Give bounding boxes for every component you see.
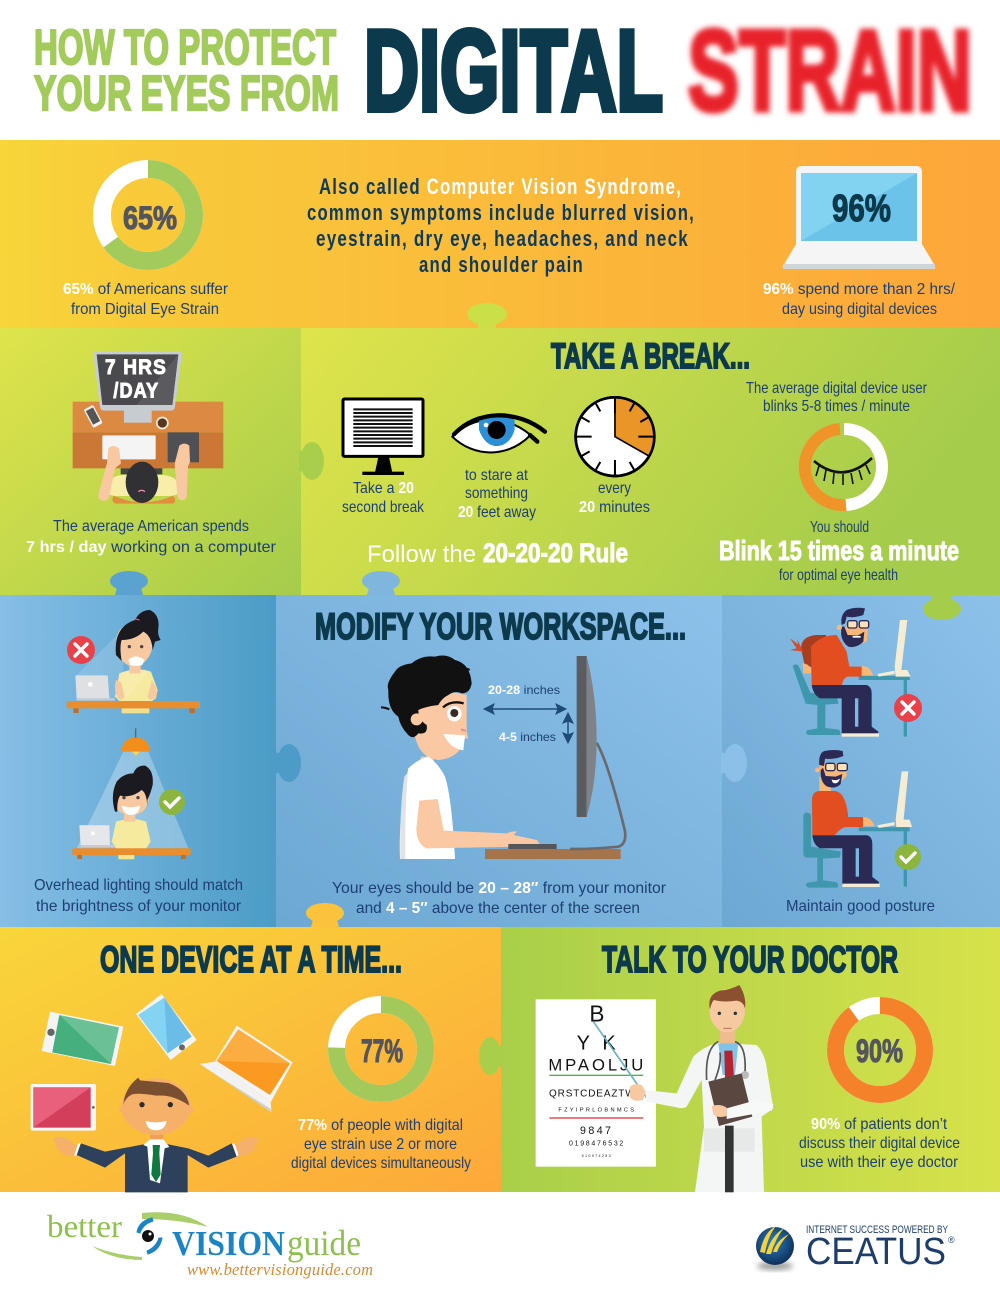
illustration: poor lighting girl [67,610,200,713]
caption: 90%: use with their eye doctor [800,1154,959,1171]
callout: follow the 20-20-20 rule [367,538,628,568]
illustration: doctor with eye chart [536,985,773,1192]
caption: distance from monitor [332,880,667,917]
callout: blink 15 times a minute: You should [810,519,869,536]
intro text: common symptoms include blurred vision, [307,200,695,225]
caption: to stare at something: 20 feet away [458,504,536,521]
panel: intro band [0,140,1000,328]
icon: desk with 7 hrs / day monitor [73,352,223,504]
logo: better vision guide: guide [287,1223,361,1263]
logo: better vision guide: www.bettervisionguide.com [187,1260,373,1279]
text: average blinks: blinks 5-8 times / minute [763,398,910,415]
callout: follow the 20-20-20 rule: Follow the [367,541,476,568]
device: blue phone [136,994,197,1060]
caption: 77%: 77% of people with digital [298,1117,463,1134]
eye chart: 510974283 [582,1154,611,1158]
donut chart: 90% [836,1006,924,1094]
callout: blink 15 times a minute: for optimal eye health [779,567,898,584]
intro text: eyestrain, dry eye, headaches, and neck [316,226,689,251]
title: how to protect your eyes from: YOUR EYES FROM [34,67,339,121]
illustration: bad posture man [790,608,911,737]
eye chart: B [589,1001,604,1027]
caption: 77% [291,1117,471,1172]
logo: better vision guide: VISION [172,1224,285,1263]
panel: lighting [0,595,276,927]
device: pink tablet [31,1084,96,1131]
text: average blinks: The average digital device user [746,380,928,397]
eye chart: K [602,1032,616,1054]
heading: modify your workspace: MODIFY YOUR WORKSPACE... [315,606,686,647]
caption: maintain good posture: Maintain good posture [786,898,935,915]
caption: computer time: The average American spends [53,518,249,535]
man [53,1078,258,1192]
eye chart: 9847 [580,1125,611,1137]
caption: every 20 minutes: 20 minutes [579,499,650,516]
logo: ceatus: INTERNET SUCCESS POWERED BY [806,1224,948,1236]
caption: 90%: discuss their digital device [799,1135,960,1152]
title: digital: DIGITAL [364,8,663,135]
caption: every 20 minutes: every [598,480,631,497]
title: how to protect your eyes from: HOW TO PROTECT [34,21,336,75]
caption: take a 20 second break: Take a 20 [353,480,414,497]
caption: to stare at something: to stare at [465,467,528,484]
icon: green check [895,844,921,870]
eye chart: MPAOLJU [548,1056,643,1075]
logo: ceatus: ® [948,1235,955,1245]
panel: talk to your doctor [501,927,1000,1192]
caption: 65% [63,281,229,318]
caption: take a 20 second break [342,480,425,516]
dimension labels: 4-5 inches [499,730,556,744]
panel: modify your workspace [276,595,722,927]
panel: computer time [0,328,301,595]
logo: better vision guide [47,1208,373,1279]
callout: follow the 20-20-20 rule: 20-20-20 Rule [483,538,628,568]
caption: 96%: day using digital devices [782,301,937,318]
eye chart: 0198476532 [569,1140,623,1147]
doctor [593,985,773,1192]
intro text: and shoulder pain [419,252,584,277]
dimension labels [488,683,560,744]
panel: one device at a time [0,927,501,1192]
donut chart: 77% [336,1004,426,1094]
caption: overhead lighting: Overhead lighting should match [34,877,243,894]
caption: to stare at something: something [465,485,528,502]
panel: take a break [301,328,1000,595]
icon: laptop 96%: 96% [832,188,891,230]
icon: blink ring with closed eye [805,429,882,505]
title: how to protect your eyes from [34,21,339,121]
logo: better vision guide: better [47,1208,122,1244]
illustration: good lighting girl [72,728,191,859]
puzzle connectors [110,303,961,1075]
caption: overhead lighting: the brightness of your monitor [36,898,242,915]
caption: 77%: digital devices simultaneously [291,1155,471,1172]
caption: every 20 minutes [579,480,650,516]
caption: 96% [763,281,956,318]
illustration: person at monitor [381,656,625,859]
eye chart: FZYIPRLOBNMCS [558,1108,634,1114]
device: green phone [42,1012,123,1066]
device: orange laptop [200,1026,293,1112]
text: average blinks [746,380,928,415]
icon: desk with 7 hrs / day monitor: 7 HRS [105,355,167,379]
callout: blink 15 times a minute [719,519,959,584]
donut chart: 90%: 90% [856,1033,903,1069]
heading: one device at a time: ONE DEVICE AT A TIME... [100,939,402,980]
caption: 90% [799,1116,960,1171]
caption: computer time: 7 hrs / day working on a computer [26,539,277,556]
caption: to stare at something [458,467,536,521]
icon: monitor [343,399,423,475]
caption: take a 20 second break: second break [342,499,425,516]
icon: eye [452,415,545,452]
icon: desk with 7 hrs / day monitor: /DAY [113,379,159,403]
icon: red x [894,694,922,722]
title [34,8,972,135]
eye chart: QRSTCDEAZTWF [549,1089,642,1100]
logo: ceatus [756,1224,955,1273]
dimension labels: 20-28 inches [488,683,560,697]
caption: distance from monitor: and 4 – 5″ above the center of the screen [356,900,640,917]
icon: laptop 96% [783,166,935,269]
donut chart: 77%: 77% [361,1033,403,1069]
icon: red x [67,636,95,664]
caption: 65%: from Digital Eye Strain [71,301,219,318]
caption: 65%: 65% of Americans suffer [63,281,229,298]
caption: 77%: eye strain use 2 or more [304,1136,457,1153]
eye chart [536,999,656,1167]
logo: ceatus: CEATUS [806,1231,946,1273]
caption: 90%: 90% of patients don’t [811,1116,947,1133]
intro text: Also called Computer Vision Syndrome, [319,174,682,199]
caption: computer time [26,518,277,556]
eye chart: Y [577,1032,590,1054]
intro text [307,174,695,277]
donut chart: 65% [102,169,194,261]
icon: clock [576,397,654,476]
illustration: man juggling devices [31,994,293,1192]
donut chart: 65%: 65% [123,200,177,236]
panel: posture [722,595,1000,927]
dimension arrows [484,704,573,743]
illustration: good posture man [803,750,912,888]
icon: green check [159,789,185,815]
caption: overhead lighting [34,877,243,915]
caption: distance from monitor: Your eyes should be 20 – 28″ from your monitor [332,880,667,897]
caption: 96%: 96% spend more than 2 hrs/ [763,281,956,298]
heading: take a break: TAKE A BREAK... [551,337,750,376]
